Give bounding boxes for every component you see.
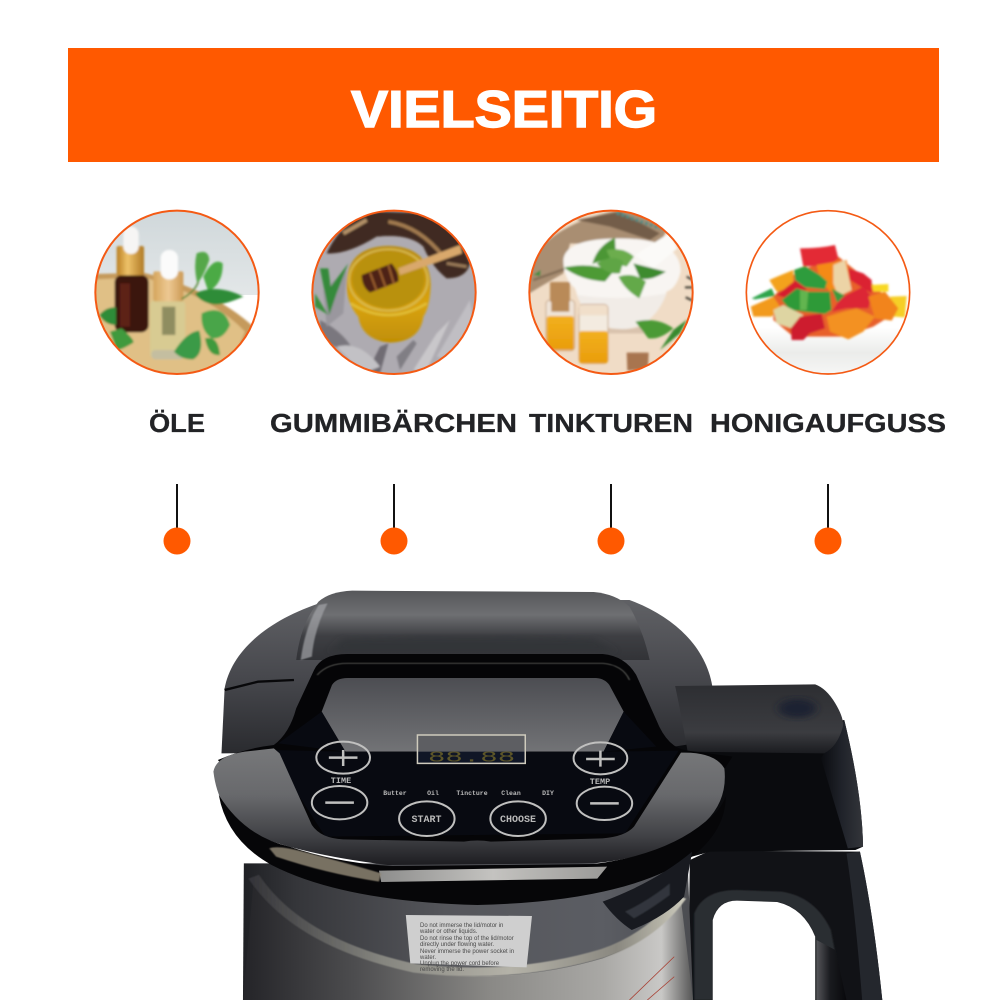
control panel lower black area: [269, 750, 679, 837]
bottle two: [579, 304, 608, 363]
clear bear: [833, 260, 852, 297]
connector: Tinkturen: [598, 484, 624, 554]
panel text: TEMP: [590, 777, 610, 787]
label: Honigaufguss: HONIGAUFGUSS: [710, 408, 946, 438]
sticker text: directly under flowing water.: [420, 942, 494, 948]
sticker text: removing the lid.: [420, 967, 464, 973]
sticker text: Never immerse the power socket in: [420, 949, 514, 955]
back dome: [221, 600, 712, 753]
front lid: [213, 748, 725, 865]
panel text: Clean: [501, 790, 521, 797]
appliance: soup maker: [213, 591, 882, 1000]
sticker text: Do not rinse the top of the lid/motor: [420, 936, 514, 942]
back bears: [769, 270, 793, 292]
title text: VIELSEITIG: [351, 81, 657, 139]
brown bottle: [115, 275, 149, 332]
panel: honey jar photo circle: [310, 208, 477, 378]
sticker text: Unplug the power cord before: [420, 961, 500, 967]
sticker text: water.: [419, 955, 436, 961]
cork: [627, 353, 649, 371]
minus temp: [577, 787, 632, 820]
red bear: [791, 313, 825, 340]
herb sprig: [320, 263, 348, 315]
clear oil bottle: [150, 302, 184, 351]
top hump: [296, 591, 650, 660]
honey dipper: [398, 245, 462, 275]
plus temp: [574, 742, 627, 774]
rim highlights: [379, 867, 607, 882]
minus time: [312, 786, 367, 819]
panel: tinctures photo circle: [527, 208, 697, 378]
sticker text: water or other liquids.: [419, 929, 478, 935]
mortar: [562, 236, 682, 299]
marble streaks: [319, 320, 350, 348]
panel text: START: [411, 815, 442, 826]
panel text: Tincture: [456, 790, 488, 797]
black arch: [218, 654, 732, 847]
green bears: [794, 266, 827, 289]
panel text: CHOOSE: [500, 815, 536, 826]
label: Öle: ÖLE: [149, 408, 205, 438]
bottle one: [546, 300, 575, 351]
burlap sack: [527, 210, 670, 295]
choose button: [490, 801, 546, 836]
panel text: TIME: [331, 776, 351, 786]
sticker text: [419, 923, 514, 973]
handle side: [674, 720, 863, 857]
orange bears: [868, 292, 898, 321]
pile base: [773, 257, 900, 337]
wooden tray: [97, 272, 252, 344]
carved wood: [327, 212, 470, 278]
honey jar: [347, 246, 431, 343]
connector: Gummibärchen: [380, 484, 408, 554]
connector: Öle: [164, 484, 190, 554]
pestle: [654, 234, 678, 252]
panel text: Oil: [427, 790, 439, 797]
start button: [399, 801, 455, 836]
label: Tinkturen: TINKTUREN: [529, 408, 693, 438]
connector: Honigaufguss: [814, 484, 842, 554]
handle top box: [675, 684, 843, 753]
stainless body: [243, 863, 693, 1000]
mint leaves: [99, 252, 243, 359]
display: [417, 735, 525, 766]
title banner: [68, 48, 939, 162]
handle opening gloss: [694, 890, 844, 1000]
control window: [322, 678, 624, 752]
panel text: Butter: [383, 790, 407, 797]
handle right arm gloss: [817, 940, 846, 1000]
panel text: DIY: [542, 790, 554, 797]
label: Gummibärchen: GUMMIBÄRCHEN: [270, 408, 517, 438]
panel: essential oils photo circle: [93, 208, 260, 377]
plus time: [316, 742, 370, 774]
pale bear: [773, 305, 803, 328]
display: 88.88: [428, 750, 515, 766]
panel: gummy bears photo circle: [743, 208, 913, 378]
handle grip: [688, 851, 882, 1000]
leaves: [564, 265, 613, 282]
safety sticker: [406, 915, 532, 967]
handle opening: [713, 901, 815, 1000]
panel text: [331, 776, 610, 826]
sticker text: Do not immerse the lid/motor in: [420, 923, 503, 929]
